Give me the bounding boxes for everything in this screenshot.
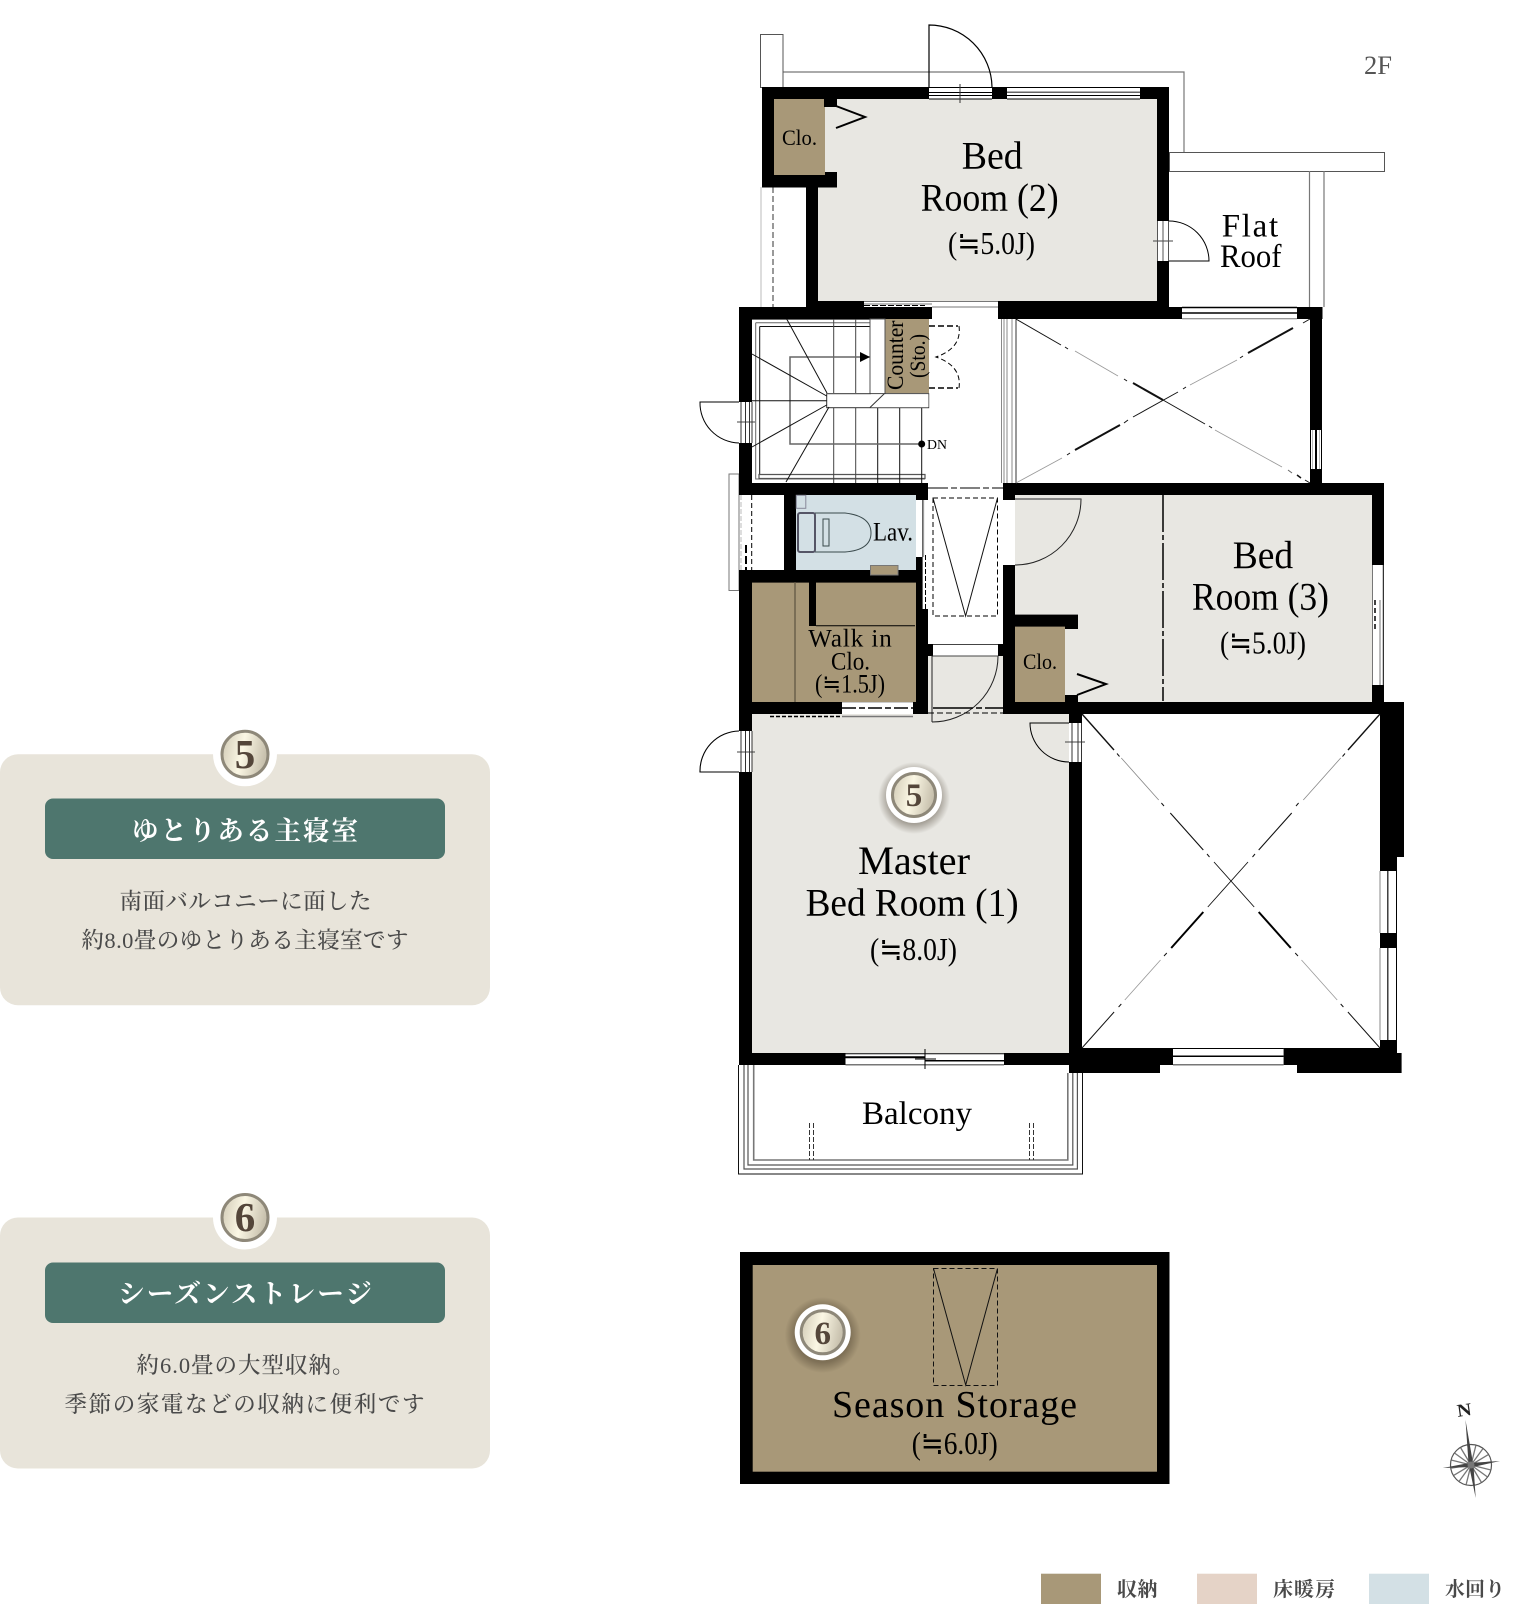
label: Walk in Clo.: Clo. bbox=[831, 648, 870, 676]
label: Master Bed Room (1): (≒8.0J) bbox=[870, 924, 957, 970]
void lines lower bbox=[1082, 714, 1380, 1048]
toilet fixture bbox=[796, 495, 871, 552]
label: Clo. bedroom 3: Clo. bbox=[1023, 649, 1057, 674]
door: bedroom 2 entrance to parapet bbox=[929, 25, 992, 103]
hatch symbol bbox=[934, 1268, 998, 1386]
text: master bedroom description bbox=[82, 889, 408, 953]
legend bbox=[1041, 1574, 1505, 1604]
label: 2F: 2F bbox=[1364, 51, 1392, 80]
label: Season Storage: (≒6.0J) bbox=[912, 1418, 998, 1464]
outside rails: roof and parapets bbox=[729, 34, 1384, 590]
floor plan: 2F bbox=[700, 25, 1404, 1174]
door: master bedroom inner bbox=[1030, 723, 1085, 762]
label: Walk in Clo.: (≒1.5J) bbox=[815, 664, 885, 700]
void lines upper bbox=[1002, 319, 1310, 483]
text: season storage description: 約6.0畳の大型収納。 bbox=[136, 1353, 354, 1378]
label: Counter (Sto.): Counter bbox=[883, 320, 908, 390]
door: master hall bbox=[928, 644, 1003, 722]
stairwell hatch symbol bbox=[928, 488, 1003, 616]
label: Master Bed Room (1): Bed Room (1) bbox=[806, 882, 1019, 925]
label: Balcony: Balcony bbox=[862, 1096, 972, 1132]
label: Flat Roof: Roof bbox=[1220, 239, 1282, 275]
heading: season storage: シーズンストレージ bbox=[118, 1279, 372, 1309]
text: season storage description bbox=[64, 1353, 424, 1417]
text: master bedroom description: 南面バルコニーに面した bbox=[120, 889, 372, 914]
label: Lav.: Lav. bbox=[873, 518, 913, 547]
lavatory shelf bbox=[870, 566, 898, 575]
door: stair side bbox=[700, 402, 755, 443]
walls bbox=[739, 87, 1404, 1073]
label: Bed Room (3): Room (3) bbox=[1192, 576, 1329, 618]
compass bbox=[1443, 1399, 1500, 1498]
windows bbox=[741, 88, 1396, 1069]
door: bedroom 3 bbox=[1015, 499, 1081, 565]
label: Counter (Sto.): (Sto.) bbox=[905, 334, 930, 378]
floor plan: season storage bbox=[740, 1252, 1170, 1484]
compass: N bbox=[1456, 1399, 1473, 1421]
label: Master Bed Room (1): Master bbox=[858, 838, 970, 883]
badge: number 5 bbox=[222, 731, 268, 777]
legend: 収納 bbox=[1117, 1578, 1158, 1601]
label: Season Storage bbox=[832, 1384, 1077, 1464]
badge: number 5: 5 bbox=[235, 731, 255, 777]
closet door openings bbox=[770, 106, 1163, 716]
stair arrow bbox=[860, 352, 870, 362]
legend: 床暖房 bbox=[1273, 1577, 1335, 1601]
room fills bbox=[752, 99, 1372, 1053]
text: master bedroom description: 約8.0畳のゆとりある主寝室です bbox=[82, 927, 408, 953]
label: Season Storage: Season Storage bbox=[832, 1384, 1077, 1426]
label: Walk in Clo. bbox=[808, 626, 892, 700]
label: Master Bed Room (1) bbox=[806, 838, 1019, 970]
badge: number 5 on plan: 5 bbox=[906, 778, 922, 814]
label: Bed Room (2): (≒5.0J) bbox=[948, 218, 1035, 264]
label: Flat Roof: Flat bbox=[1222, 209, 1278, 245]
label: Bed Room (3): Bed bbox=[1233, 534, 1294, 577]
door: master bedroom side bbox=[700, 731, 755, 772]
stairs bbox=[752, 319, 929, 483]
legend: 水回り bbox=[1445, 1578, 1505, 1601]
panel: master bedroom feature bbox=[0, 722, 490, 1005]
label: Bed Room (2) bbox=[921, 134, 1059, 264]
badge: number 6: 6 bbox=[235, 1194, 255, 1240]
badge: number 5 on plan bbox=[878, 762, 950, 834]
label: Bed Room (2): Room (2) bbox=[921, 177, 1059, 220]
label: Clo. bedroom 2: Clo. bbox=[782, 125, 817, 150]
stair DN marker bbox=[918, 438, 947, 453]
badge: number 6 on plan bbox=[785, 1297, 861, 1373]
label: Bed Room (3) bbox=[1192, 534, 1329, 664]
label: Bed Room (3): (≒5.0J) bbox=[1220, 618, 1306, 664]
badge: number 6 on plan: 6 bbox=[814, 1316, 831, 1352]
heading: master bedroom: ゆとりある主寝室 bbox=[132, 816, 358, 846]
badge: number 6 bbox=[222, 1194, 268, 1240]
label: Flat Roof bbox=[1220, 209, 1282, 275]
panel: season storage feature bbox=[0, 1186, 490, 1468]
door: flat roof bbox=[1153, 221, 1209, 261]
label: Walk in Clo.: Walk in bbox=[808, 626, 892, 652]
text: season storage description: 季節の家電などの収納に便利です bbox=[64, 1392, 424, 1417]
label: Bed Room (2): Bed bbox=[962, 134, 1023, 178]
stair DN marker: DN bbox=[927, 438, 947, 453]
balcony rails bbox=[738, 1065, 1082, 1174]
label: Counter (Sto.) bbox=[883, 320, 930, 390]
